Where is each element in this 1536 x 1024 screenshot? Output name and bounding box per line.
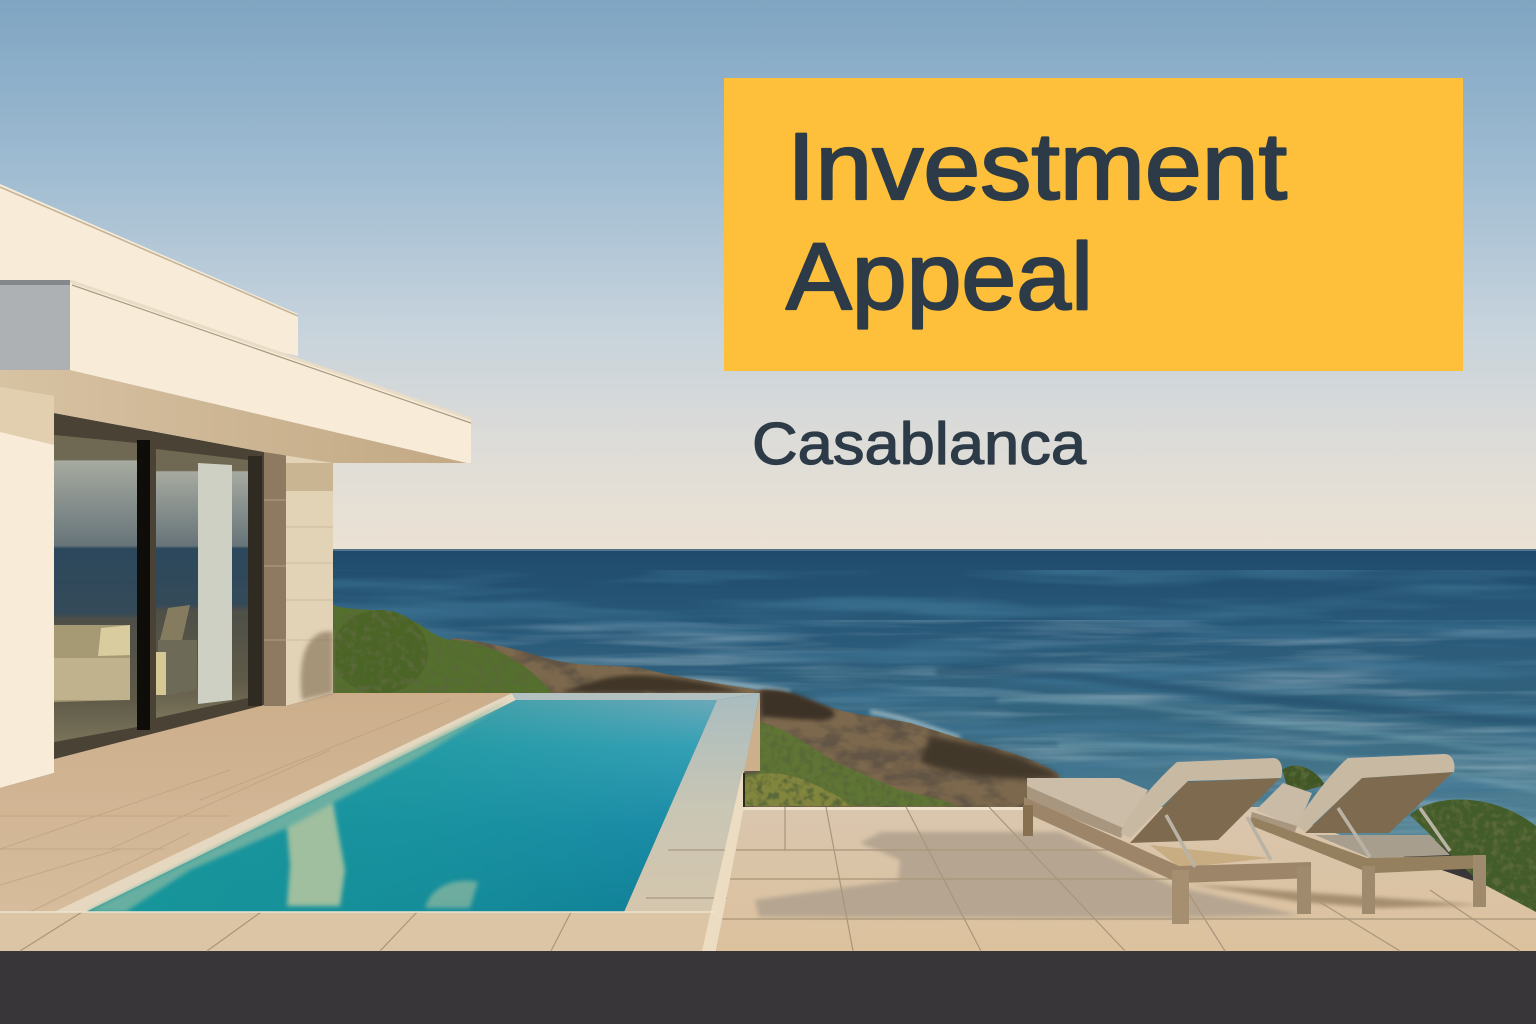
soffit [0,370,467,463]
pier plant shadow [301,632,333,700]
heading: Investment Appeal: Appeal [786,224,1093,330]
coastal shrubs [332,605,1536,912]
rocky coast [450,638,1060,808]
terrace floor right [716,807,1536,951]
sky background [0,0,1536,552]
sun lounger: front [1023,758,1311,924]
terrace floor left [0,693,512,912]
sliding doors [54,413,264,759]
bottom bar [0,952,1536,1024]
villa [0,184,471,788]
title panel [724,78,1463,371]
stone pier [264,452,333,706]
subtitle: Casablanca: Casablanca [752,411,1086,477]
heading: Investment Appeal [786,114,1287,330]
sea [300,549,1536,840]
heading: Investment Appeal: Investment [787,114,1287,220]
roof slab [70,280,471,463]
upper roof volume [0,184,298,356]
interior sofa [54,625,130,702]
infinity pool [0,693,760,951]
sun lounger: rear [1250,754,1486,914]
curtain [198,463,232,704]
left wall [0,387,54,788]
